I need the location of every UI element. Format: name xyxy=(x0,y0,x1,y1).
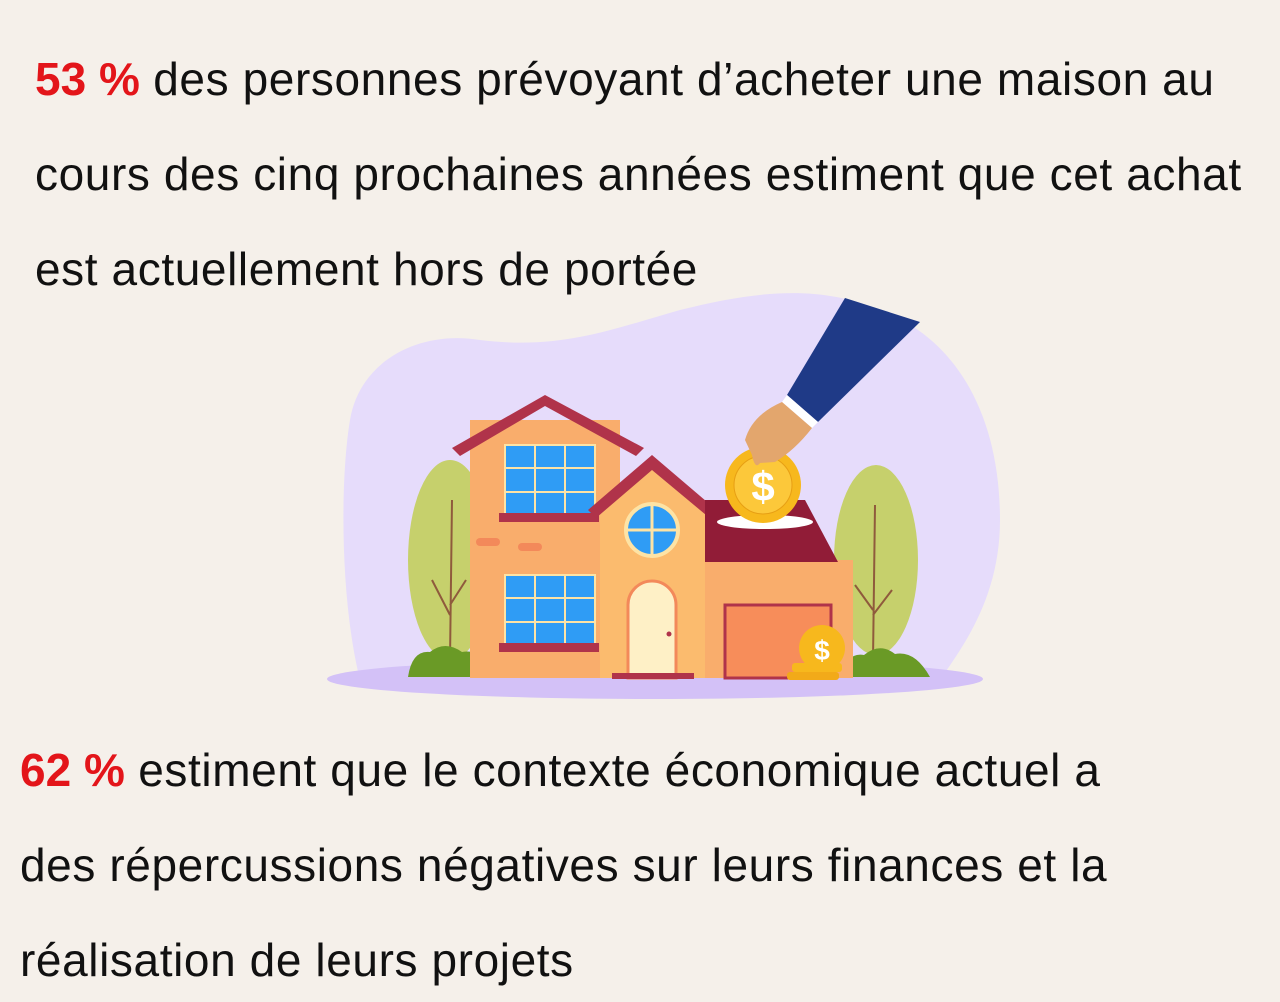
text block: top statistic: est actuellement hors de portée xyxy=(35,243,698,295)
background blob xyxy=(343,293,1000,680)
text block: top statistic: 53 % des personnes prévoyant d’acheter une maison au xyxy=(35,53,1215,105)
text block: bottom statistic: 62 % estiment que le contexte économique actuel a xyxy=(20,744,1101,796)
coins xyxy=(725,447,845,680)
ground xyxy=(327,659,983,699)
bushes xyxy=(408,646,498,677)
text block: top statistic xyxy=(35,53,1242,295)
garage xyxy=(705,560,853,678)
left tall house xyxy=(470,420,620,678)
text block: bottom statistic xyxy=(20,744,1107,986)
coins: $ xyxy=(751,463,775,510)
text block: top statistic: cours des cinq prochaines années estiment que cet achat xyxy=(35,148,1242,200)
coins: $ xyxy=(814,635,830,666)
trees xyxy=(408,460,918,660)
text block: bottom statistic: des répercussions négatives sur leurs finances et la xyxy=(20,839,1107,891)
middle gable xyxy=(600,460,705,678)
hand with sleeve xyxy=(745,298,920,465)
text block: bottom statistic: réalisation de leurs projets xyxy=(20,934,574,986)
